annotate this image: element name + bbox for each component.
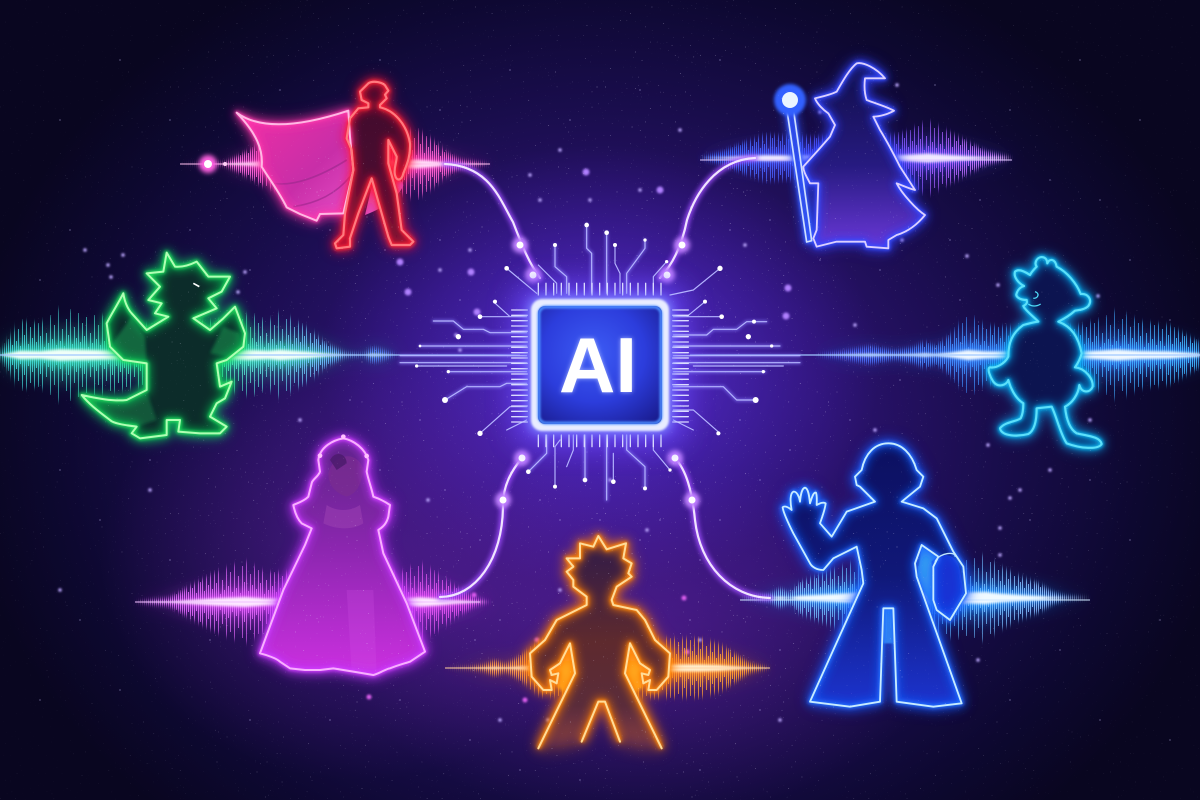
AI chip with circuit traces [400, 223, 800, 500]
waveform: blue robot boy [740, 554, 1090, 642]
waveform end dot [199, 155, 227, 173]
character: cartoon kid [989, 257, 1102, 448]
connector nodes [495, 237, 700, 508]
circuit traces [400, 223, 800, 500]
character: caped superhero [237, 82, 413, 248]
waveform: cartoon kid [690, 309, 1200, 401]
chip label: AI [559, 321, 637, 409]
waveform: orange fighter [445, 638, 770, 698]
chip body [528, 296, 672, 434]
glow between arms and torso [550, 645, 650, 693]
character: blue boy waving [783, 443, 966, 707]
character: spiky-haired fighter [530, 536, 670, 748]
chip ambient glow [515, 285, 685, 445]
character: wizard with staff [774, 63, 925, 248]
waveform: wizard [700, 120, 1012, 196]
chip label: AI [559, 321, 637, 409]
waveform: dragon [0, 307, 520, 403]
wizard staff orb [774, 84, 806, 116]
connector curves to chip [440, 158, 770, 598]
character: green dragon [82, 253, 245, 438]
waveform: princess [135, 560, 490, 644]
waveform: superhero [180, 128, 490, 200]
character: princess in gown [260, 434, 425, 675]
circuit end nodes [415, 223, 773, 490]
